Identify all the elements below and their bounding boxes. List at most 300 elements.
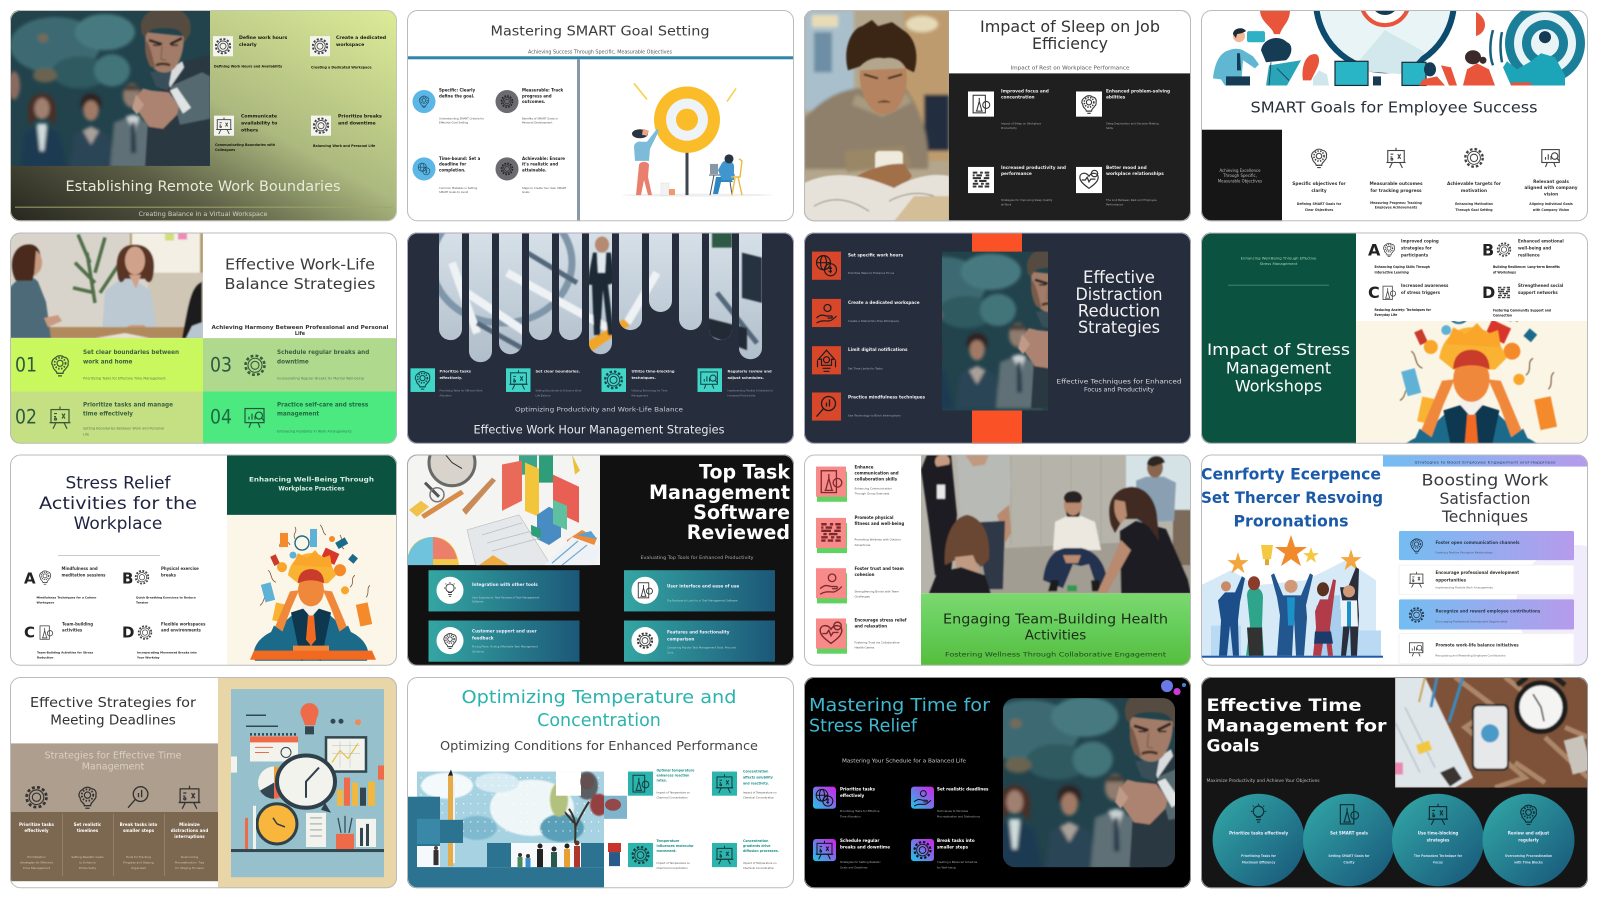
band: work-life balance	[1399, 634, 1574, 664]
block 02: time effectively	[83, 412, 133, 418]
item: realistic deadlines	[911, 787, 989, 818]
item: schedule breaks: Goals and Deadlines	[840, 866, 868, 870]
item: mindfulness: Practice mindfulness techniques	[848, 394, 926, 399]
item: trust: Challenges	[854, 594, 870, 598]
item A: Enhancing Coping Skills Through	[1374, 265, 1430, 269]
item: fitness	[816, 515, 904, 553]
panel: Impact of Stress Management Workshops slide	[1201, 232, 1588, 478]
circle: prioritize tasks: Prioritizing Tasks for	[1241, 854, 1276, 858]
title: Effective Strategies for	[30, 695, 196, 711]
item: communicate availability: others	[241, 128, 258, 134]
title	[1076, 268, 1162, 337]
title: Effective	[1083, 268, 1155, 287]
item: measurable: progress and	[522, 93, 552, 98]
panel: Mastering SMART Goal Setting slide	[407, 10, 794, 221]
item: prioritize tasks	[410, 368, 483, 397]
title: Stress Relief	[809, 716, 918, 736]
item: prioritize breaks	[311, 114, 382, 148]
subtitle	[44, 750, 182, 773]
panel: Optimizing Temperature and Concentration slide	[407, 677, 794, 888]
card: user interface: Top Features to Look for in Task Management Software	[667, 598, 738, 602]
column: minimize distractions: interruptions	[174, 834, 205, 839]
photo: man pointing	[957, 670, 1247, 894]
title: Activities for the	[39, 494, 197, 514]
item: concentration solubility: Concentration	[743, 770, 768, 774]
item: temperature movement: movement.	[656, 849, 677, 853]
item: realistic deadlines: Set realistic deadlines	[937, 787, 989, 792]
card: features comparison: Features and functionality	[667, 630, 729, 635]
band: open communication	[1399, 531, 1574, 560]
illustration: clocks, charts and office items	[231, 689, 384, 877]
item: prioritize tasks: Allocation	[440, 393, 452, 397]
item: schedule breaks	[813, 838, 890, 870]
item B: of Workshops	[1493, 271, 1516, 275]
title: Effective Time	[1206, 696, 1362, 716]
column: measurable outcomes: Measurable outcomes	[1369, 182, 1423, 187]
subtitle: Evaluating Top Tools for Enhanced Productivity	[640, 555, 754, 561]
left heading	[1201, 465, 1383, 530]
item: define work hours	[213, 35, 288, 68]
item D: Connection	[1493, 313, 1512, 317]
item: problem solving	[1076, 88, 1170, 130]
item: set work hours: Prioritize Tasks to Enhance Focus	[848, 271, 895, 275]
illustration: snow scene with blue blocks	[407, 770, 627, 888]
band: recognize and reward: Recognize and reward employee contributions	[1436, 608, 1541, 613]
item: concentration gradients: Concentration	[743, 839, 768, 843]
illustration: stressed man	[250, 525, 376, 661]
item: prioritize tasks: effectively.	[440, 376, 463, 380]
column: break tasks	[120, 787, 158, 870]
title: Effective Work Hour Management Strategies	[474, 423, 725, 437]
column: break tasks: Break tasks into	[120, 822, 157, 827]
panel: Impact of Sleep on Job Efficiency slide	[804, 10, 1191, 221]
subtitle block: Achieving Excellence	[1219, 168, 1261, 173]
item: temperature movement: Temperature	[656, 839, 679, 843]
subtitle: Effective Techniques for Enhanced	[1057, 378, 1182, 385]
item: focus	[968, 88, 1049, 130]
item A: A	[24, 569, 36, 587]
circle: prioritize tasks: Prioritize tasks effectively	[1229, 830, 1288, 835]
title: Management	[1226, 358, 1331, 377]
panel heading: Workplace Practices	[278, 487, 345, 493]
panel: Effective Work Hour Management Strategies slide	[407, 202, 794, 444]
panel: Effective Time Management for Goals slide	[1201, 677, 1592, 888]
subtitle block: Through Specific,	[1222, 173, 1257, 178]
item: prioritize breaks: and downtime	[338, 121, 376, 127]
band: open communication: Fostering Positive Workplace Relationships	[1436, 551, 1493, 555]
column: relevant goals: Relevant goals	[1533, 180, 1569, 185]
item: time-bound: Common Mistakes in Setting	[439, 186, 477, 190]
item: prioritize tasks: Prioritizing Tasks for Efficient Work	[440, 389, 482, 392]
panel: Engaging Team-Building Health Activities slide	[804, 454, 1191, 666]
subtitle	[212, 325, 388, 335]
subtitle: Optimizing Conditions for Enhanced Performance	[440, 738, 758, 753]
card: customer support: feedback	[472, 636, 494, 641]
item: stress relief: Fostering Trust via Collaborative	[854, 641, 899, 645]
illustration: team raising stars	[1201, 535, 1383, 658]
left heading: Set Thercer Resvoing	[1201, 488, 1383, 507]
item: fitness: fitness and well-being	[854, 521, 904, 526]
item: concentration gradients: gradients drive	[743, 844, 770, 848]
title: Concentration	[537, 711, 661, 731]
illustration: target with two people	[622, 83, 772, 197]
title	[943, 611, 1168, 644]
item: regular review: Regularly review and	[728, 369, 772, 373]
title: Effective Work-Life	[225, 256, 375, 274]
block 01	[10, 338, 203, 391]
block 01: work and home	[83, 359, 133, 365]
panel: SMART Goals for Employee Success slide	[1201, 0, 1588, 221]
title: Stress Relief	[65, 474, 172, 494]
subtitle: Achieving Success Through Specific, Measurable Objectives	[528, 49, 672, 55]
item: productivity: Increased productivity and	[1001, 166, 1066, 171]
item: time blocking: Utilizing Technology for Time	[632, 389, 667, 392]
item D: Incorporating Movement Breaks into	[137, 651, 197, 655]
item B: well-being and	[1518, 246, 1551, 251]
column: break tasks: Organized	[131, 866, 146, 870]
photo strips: clock and figure	[432, 202, 770, 368]
column: prioritize tasks: Strategies for Effective	[20, 861, 53, 865]
item: optimal temperature: Impact of Temperature on	[656, 792, 690, 795]
item D	[122, 622, 206, 660]
column: prioritize tasks: Prioritization	[27, 855, 46, 859]
item: achievable: Steps to Create Your Own SMART	[522, 186, 566, 190]
column: specific objectives: Clear Objectives	[1305, 208, 1333, 212]
title	[649, 462, 791, 544]
column: minimize distractions: Procrastination: Tips	[175, 861, 205, 865]
block 03: downtime	[277, 359, 309, 365]
item: clear boundaries	[506, 368, 582, 397]
item D	[1482, 283, 1564, 317]
title: Software	[693, 502, 790, 524]
item: focus: Productivity	[1001, 126, 1017, 130]
item: clear boundaries: Life Balance	[536, 393, 551, 397]
item B: Quick Breathing Exercises to Reduce	[136, 595, 196, 599]
item D: support networks	[1518, 290, 1558, 295]
item A: Workspace	[36, 600, 54, 604]
item B: Physical exercise	[161, 566, 199, 571]
subtitle: Fostering Wellness Through Collaborative Engagement	[945, 652, 1167, 659]
title: Establishing Remote Work Boundaries	[65, 179, 340, 195]
column: minimize distractions: for Staying Focused	[175, 866, 204, 870]
item: time-bound	[412, 156, 481, 194]
circle: review and adjust	[1482, 794, 1574, 886]
column: measurable outcomes	[1369, 148, 1423, 210]
card: features comparison: comparison	[667, 637, 694, 642]
band: recognize and reward	[1399, 599, 1574, 630]
item: measurable: outcomes.	[522, 99, 546, 104]
circle: prioritize tasks: Maximum Efficiency	[1242, 861, 1275, 865]
item: measurable: Personal Development	[522, 121, 552, 125]
item C	[24, 622, 93, 660]
top banner	[1383, 454, 1588, 467]
photo: tired young man in bed	[804, 10, 949, 221]
item: set work hours	[812, 252, 904, 280]
item: temperature movement: Impact of Temperature on	[656, 862, 690, 865]
decoration: bubbles	[1161, 680, 1186, 695]
item: temperature movement: Chemical Concentration	[656, 866, 688, 870]
item: communicate availability: Communicating Boundaries with	[215, 143, 275, 147]
block 01: 01	[15, 354, 37, 376]
item C: Everyday Life	[1374, 313, 1397, 317]
item: trust: Strengthening Bonds with Team	[854, 589, 899, 593]
item B	[122, 566, 199, 604]
item: set work hours: Set specific work hours	[848, 253, 904, 258]
column: prioritize tasks: effectively	[24, 828, 49, 833]
card: features comparison	[624, 620, 775, 662]
item: realistic deadlines: Procrastination and Distractions	[937, 814, 980, 818]
card: customer support: Customer support and user	[472, 629, 537, 634]
item: communicate availability: Colleagues	[215, 148, 235, 152]
item: mood: Performance	[1106, 203, 1123, 207]
item B: Building Resilience: Long-term Benefits	[1493, 265, 1560, 269]
column: realistic timelines: to Enhance	[79, 861, 96, 865]
block 02: Setting Boundaries Between Work and Personal	[83, 427, 164, 431]
title	[1206, 696, 1387, 756]
panel: Mastering Time for Stress Relief slide	[804, 670, 1247, 894]
column: realistic timelines: Setting Realistic Goals	[71, 855, 104, 859]
item: achievable: Goals	[522, 190, 530, 194]
block 01: Prioritizing Tasks for Effective Time Management	[83, 376, 166, 380]
card: customer support: Pricing Plans: Finding Affordable Task Management	[472, 646, 538, 649]
item B	[1482, 239, 1564, 275]
title	[224, 256, 376, 293]
column: prioritize tasks	[19, 787, 55, 870]
item: achievable: attainable.	[522, 168, 547, 173]
column: measurable outcomes: for tracking progress	[1370, 188, 1422, 194]
item D: Flexible workspaces	[161, 622, 205, 627]
circle: review and adjust: Review and adjust	[1508, 830, 1549, 835]
title	[809, 696, 991, 736]
card: features comparison: Comparing Popular Task Management Tools: Pros and	[667, 647, 736, 650]
panel: Effective Strategies for Meeting Deadlines slide	[10, 677, 397, 888]
item: concentration solubility: Impact of Temperature on	[743, 792, 777, 795]
block 03: 03	[210, 354, 232, 376]
column: minimize distractions	[171, 786, 208, 870]
column: relevant goals: with Company Vision	[1533, 208, 1569, 212]
item: measurable: Measurable: Track	[522, 87, 563, 92]
top banner: Strategies to Boost Employee Engagement and Happiness	[1415, 461, 1556, 465]
panel: Effective Distraction Reduction Strategies slide	[804, 229, 1191, 444]
item D: and environments	[161, 628, 202, 633]
item: mindfulness	[812, 392, 926, 421]
block 04: Practice self-care and stress	[277, 403, 368, 409]
item: clear boundaries: Setting Boundaries to Enhance Work-	[536, 389, 582, 392]
item: concentration solubility: affects solubility	[743, 776, 774, 780]
item: temperature movement: influences molecular	[656, 844, 694, 848]
item D: D	[1482, 283, 1495, 302]
item: stress relief: and relaxation	[854, 624, 887, 629]
item A: Interactive Learning	[1374, 271, 1409, 275]
subtitle: Stress Management	[1260, 261, 1298, 266]
column: break tasks: smaller steps	[123, 828, 155, 833]
item: focus: concentration	[1001, 95, 1035, 101]
item D: D	[122, 624, 134, 642]
circle: review and adjust: with Time Blocks	[1514, 861, 1543, 865]
item: communication: Enhancing Communication	[854, 487, 892, 491]
subtitle: Impact of Rest on Workplace Performance	[1011, 65, 1130, 71]
item: prioritize tasks: Prioritize tasks	[440, 369, 471, 373]
item: achievable	[496, 156, 567, 194]
item: prioritize tasks: Prioritize tasks	[840, 787, 875, 792]
item: break tasks: Break tasks into	[937, 838, 975, 843]
photo: blurred team crop	[876, 229, 1136, 431]
item: fitness: Adventures	[854, 543, 871, 547]
item A: Mindfulness and	[62, 566, 98, 571]
item: focus: Improved focus and	[1001, 89, 1049, 94]
title: Workplace	[74, 514, 162, 534]
item: concentration solubility	[712, 770, 777, 800]
title	[30, 695, 196, 728]
subtitle: Enhancing Well-Being Through Effective	[1241, 256, 1316, 261]
band: professional development: Encourage professional development	[1436, 570, 1519, 575]
item: fitness: Promoting Wellness with Outdoor	[854, 538, 901, 542]
block 04	[203, 391, 397, 444]
block 02: Life	[83, 433, 89, 437]
item: optimal temperature: enhances reaction	[656, 774, 690, 778]
item C: Team-building	[62, 622, 93, 627]
panel: Establishing Remote Work Boundaries slide	[0, 0, 397, 221]
column: realistic timelines	[71, 787, 104, 870]
item B: Tension	[136, 600, 148, 604]
column: break tasks: Tools for Tracking	[126, 855, 151, 859]
panel: Effective Work-Life Balance Strategies slide	[10, 232, 397, 444]
item: communication: communication and	[854, 471, 899, 476]
item: stress relief	[816, 617, 907, 654]
column: relevant goals: aligned with company	[1524, 185, 1578, 191]
circle: SMART goals: Set SMART goals	[1330, 830, 1369, 835]
item: prioritize breaks: Balancing Work and Personal Life	[313, 144, 376, 148]
item: optimal temperature	[628, 769, 694, 800]
item: digital notifications	[812, 346, 908, 374]
item: prioritize tasks: Prioritizing Tasks for Effective	[840, 809, 879, 813]
block 04: management	[277, 412, 319, 418]
item: specific: Understanding SMART Criteria for	[439, 117, 484, 121]
item: productivity: performance	[1001, 171, 1032, 177]
item: stress relief: Encourage stress relief	[854, 617, 907, 622]
title: Satisfaction	[1440, 490, 1530, 508]
column: achievable targets: Through Goal Setting	[1455, 208, 1493, 212]
item: concentration solubility: Chemical Concentration	[743, 796, 774, 800]
item: regular review	[698, 368, 774, 397]
item: time blocking: Management	[632, 393, 648, 397]
item: communication: collaboration skills	[854, 477, 898, 482]
column: achievable targets: motivation	[1461, 188, 1487, 194]
item: time-bound: deadline for	[439, 162, 466, 167]
item: digital notifications: Limit digital notifications	[848, 347, 908, 352]
item: dedicated workspace	[812, 299, 920, 327]
subtitle: Optimizing Productivity and Work-Life Balance	[515, 406, 683, 414]
item A: Mindfulness Techniques for a Calmer	[36, 595, 96, 599]
panel heading	[249, 478, 374, 493]
item: communicate availability: availability to	[241, 121, 278, 127]
item B: B	[122, 569, 133, 587]
circle: review and adjust: Overcoming Procrastination	[1505, 854, 1552, 858]
item: break tasks	[911, 838, 978, 870]
item: communication: Through Group Exercises	[854, 492, 890, 496]
item: communication: Enhance	[854, 465, 874, 470]
block 02: Prioritize tasks and manage	[83, 403, 173, 409]
item A	[24, 566, 106, 604]
item: concentration gradients: Impact of Temperature on	[743, 862, 777, 865]
card: integration: Software	[472, 600, 484, 604]
band: work-life balance: Promote work-life balance initiatives	[1436, 643, 1519, 648]
item: realistic deadlines: Techniques to Minimize	[937, 809, 968, 813]
circle: time blocking: strategies	[1427, 837, 1450, 842]
item: time-bound: Time-bound: Set a	[439, 156, 480, 161]
subtitle block	[1201, 130, 1282, 221]
fragment: figure beside image	[608, 843, 621, 866]
item C: of stress triggers	[1401, 290, 1441, 295]
item C: C	[1368, 283, 1380, 302]
subtitle: Mastering Your Schedule for a Balanced Life	[842, 758, 966, 765]
title	[1422, 472, 1549, 526]
column: minimize distractions: Minimize	[179, 822, 200, 827]
subtitle block: Measurable Objectives	[1218, 178, 1262, 183]
title: Impact of Sleep on Job	[980, 17, 1160, 36]
title: Impact of Stress	[1207, 340, 1350, 359]
item: optimal temperature: Optimal temperature	[656, 769, 694, 773]
item: prioritize tasks: Time Allocation	[839, 814, 861, 818]
column: measurable outcomes: Employee Achievements	[1375, 206, 1417, 210]
card: integration: Integration with other tools	[472, 582, 538, 587]
subtitle	[1056, 378, 1182, 393]
title: Boosting Work	[1422, 472, 1549, 490]
item: concentration gradients	[712, 839, 779, 870]
item: define work hours: clearly	[239, 42, 257, 48]
item B: Enhanced emotional	[1518, 239, 1564, 244]
card: user interface	[624, 570, 775, 611]
circle: time blocking: Focus	[1433, 861, 1443, 865]
column: specific objectives: clarity	[1311, 188, 1327, 194]
item C: C	[24, 624, 35, 642]
item: problem solving: Enhanced problem-solving	[1106, 89, 1170, 94]
item: digital notifications: Set Time Limits for Tasks	[848, 366, 883, 370]
item C: Reducing Anxiety: Techniques for	[1374, 308, 1431, 312]
item: dedicated workspace	[310, 35, 386, 69]
item: mindfulness: Use Technology to Block Interruptions	[848, 414, 901, 418]
block 02	[10, 391, 203, 444]
circle: time blocking	[1392, 794, 1484, 886]
item: focus: Impact of Sleep on Workplace	[1001, 122, 1041, 126]
block 02: 02	[15, 407, 37, 429]
title band	[921, 593, 1191, 666]
title: SMART Goals for Employee Success	[1250, 99, 1538, 117]
item: temperature movement	[628, 839, 694, 870]
item: optimal temperature: rates.	[656, 779, 667, 783]
column: relevant goals: vision	[1544, 192, 1558, 198]
title: Management	[649, 482, 790, 504]
item: dedicated workspace: Create a dedicated	[336, 36, 386, 41]
title: Top Task	[699, 462, 791, 484]
circle: prioritize tasks	[1213, 794, 1305, 886]
item B: resilience	[1518, 253, 1540, 258]
column: relevant goals: Aligning Individual Goals	[1529, 202, 1573, 206]
item B: B	[1482, 241, 1494, 260]
item: fitness: Promote physical	[854, 515, 893, 520]
item C: Reduction	[37, 656, 53, 660]
subtitle: Management	[82, 762, 145, 773]
panel: Boosting Work Satisfaction Techniques slide	[1201, 454, 1600, 666]
item: mood: workplace relationships	[1106, 171, 1164, 177]
subtitle: Creating Balance in a Virtual Workspace	[138, 211, 268, 218]
item: problem solving: abilities	[1106, 95, 1126, 101]
item: dedicated workspace: Create a Distraction-Free Workspace	[848, 319, 899, 323]
photo: man pointing	[10, 10, 210, 166]
subtitle: Life	[295, 331, 306, 337]
item: achievable: Achievable: Ensure	[522, 156, 565, 161]
item C	[1368, 283, 1449, 317]
